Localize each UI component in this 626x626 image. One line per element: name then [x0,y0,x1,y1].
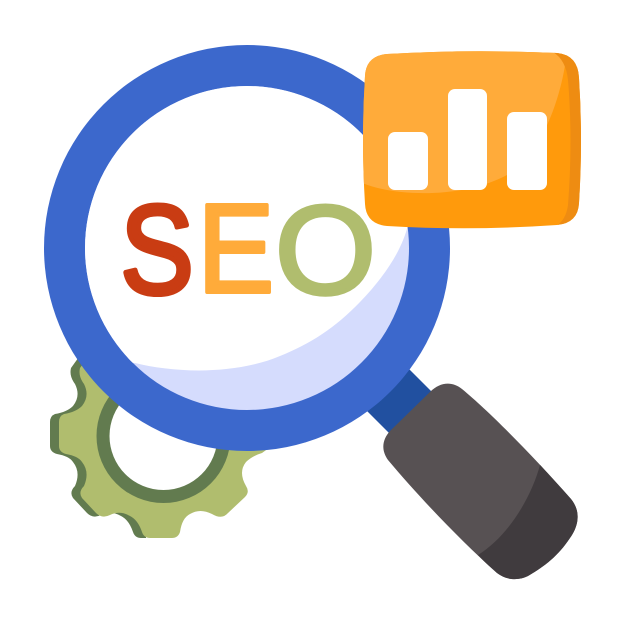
bar 1 [388,132,428,190]
bar 2 [448,89,487,190]
handle body [383,384,578,580]
letter E: E [198,178,274,319]
lens tint [80,80,420,420]
gear hole ring [96,369,230,503]
letter S: S [120,180,194,321]
bar 3 [507,112,547,190]
icon: gear [50,359,266,538]
lens [85,86,409,410]
handle neck [366,368,434,436]
gear body [59,340,280,538]
handle [383,384,578,580]
gear shadow [50,359,146,538]
infographic: SEO magnifying glass [44,45,581,580]
chart card [360,45,585,235]
card highlight [360,45,567,193]
letter O: O [275,180,376,321]
card edge [554,52,581,225]
lens highlight [85,86,408,370]
gear hole [110,382,218,490]
handle shade [478,465,578,580]
card base [360,45,585,235]
magnifier ring [44,45,450,451]
SEO text [120,178,376,321]
